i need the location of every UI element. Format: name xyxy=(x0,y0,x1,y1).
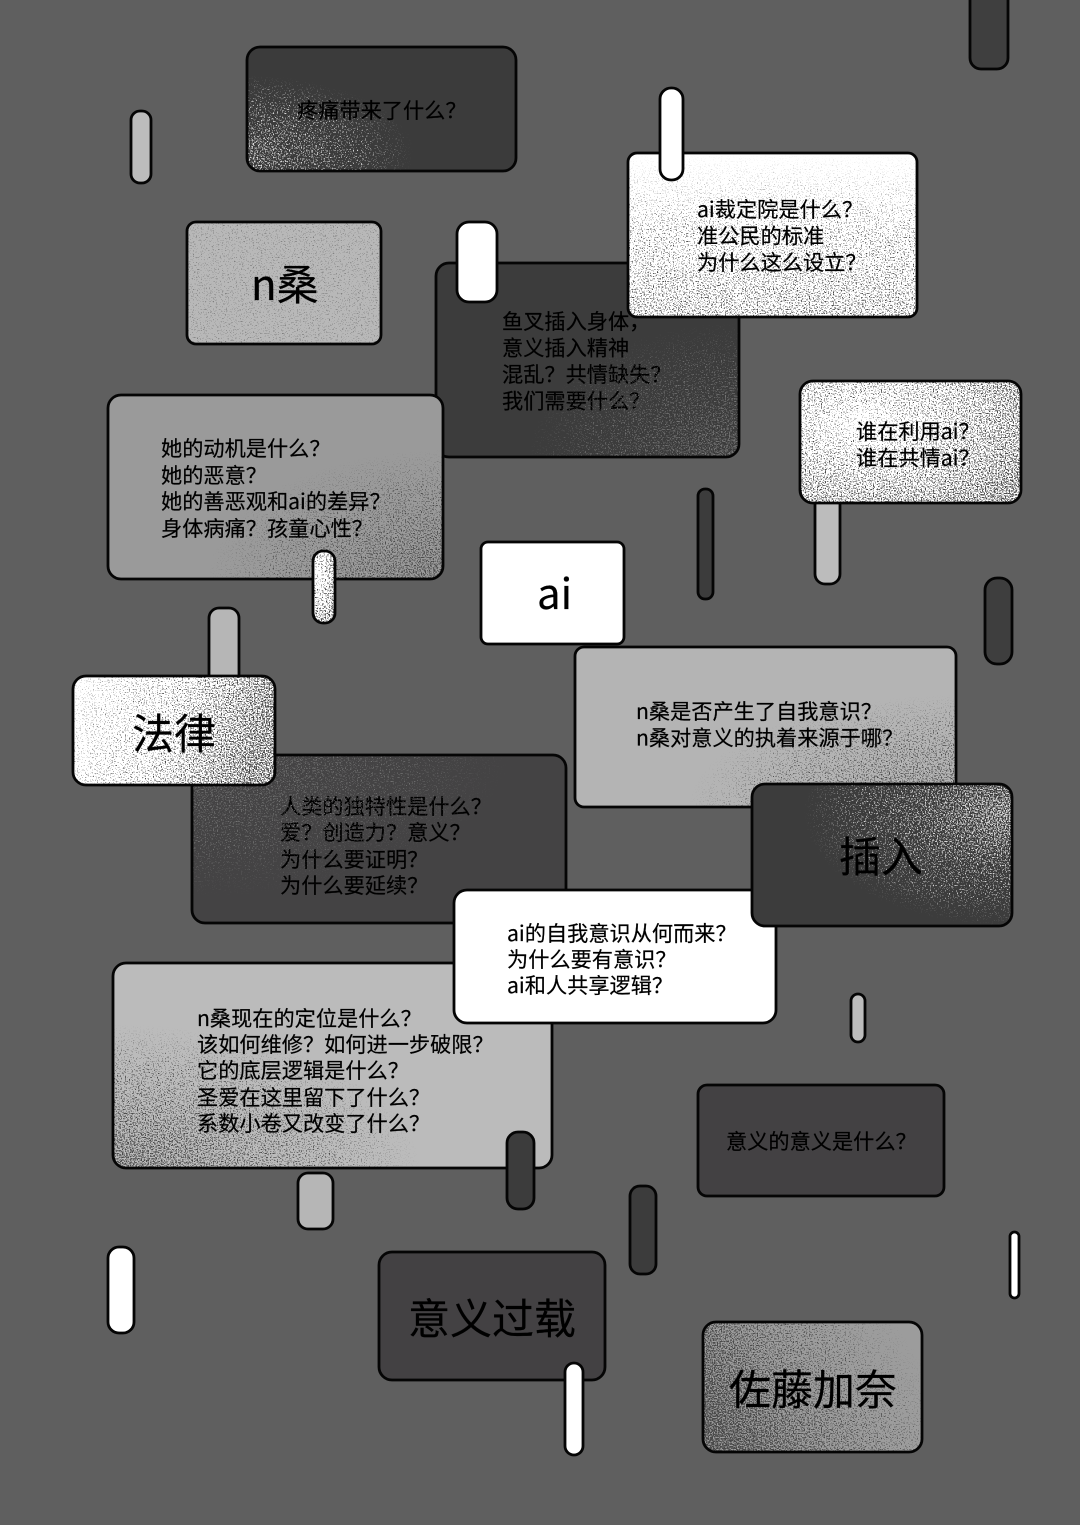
text: 佐藤加奈: 佐藤加奈 xyxy=(729,1357,897,1418)
pill: white lower left xyxy=(108,1247,134,1333)
text: n桑 status: 系数小卷又改变了什么？ xyxy=(197,1107,430,1138)
card: insertion title xyxy=(752,784,1012,926)
pill: small gray lower right xyxy=(851,994,865,1042)
card: ai tribunal question xyxy=(628,153,917,317)
card: who uses ai xyxy=(800,381,1021,503)
text: n桑 status: 该如何维修？如何进一步破限？ xyxy=(197,1028,494,1059)
text: ai tribunal question: ai裁定院是什么？ xyxy=(697,193,863,224)
text: n桑 self awareness: n桑是否产生了自我意识？ xyxy=(636,695,882,726)
card: meaning overload title xyxy=(379,1252,605,1380)
card: n桑 status xyxy=(113,963,552,1168)
text: her motive: 她的善恶观和ai的差异？ xyxy=(161,485,391,516)
pill: white on tribunal card xyxy=(660,88,683,180)
text: 插入: 插入 xyxy=(839,824,923,885)
card: her motive xyxy=(108,395,443,579)
pill: dark on status card xyxy=(507,1132,534,1209)
text: ai tribunal question: 为什么这么设立？ xyxy=(697,246,867,277)
text: n桑 self awareness: n桑对意义的执着来源于哪？ xyxy=(636,722,903,752)
text: harpoon question: 鱼叉插入身体， xyxy=(502,305,650,336)
text: her motive: 身体病痛？孩童心性？ xyxy=(161,512,373,543)
card: pain question xyxy=(247,47,516,171)
text: 意义过载: 意义过载 xyxy=(408,1286,576,1347)
text: n桑 status: 它的底层逻辑是什么？ xyxy=(197,1054,409,1085)
text: ai tribunal question: 准公民的标准 xyxy=(697,220,824,250)
pill: dark top right xyxy=(970,0,1008,69)
text: human uniqueness: 人类的独特性是什么？ xyxy=(280,790,492,821)
text: who uses ai: 谁在利用ai？ xyxy=(856,415,980,446)
text: meaning of meaning: 意义的意义是什么？ xyxy=(726,1125,917,1156)
text: ai self awareness: ai的自我意识从何而来？ xyxy=(507,917,737,948)
pill: gray under who card xyxy=(815,490,840,584)
pill: white on harpoon card xyxy=(457,222,497,302)
card: n桑 self awareness xyxy=(575,647,956,807)
pill: thin dark middle xyxy=(698,489,713,599)
text: n桑 status: 圣爱在这里留下了什么？ xyxy=(197,1081,430,1112)
card: harpoon question xyxy=(436,263,739,457)
text: her motive: 她的恶意？ xyxy=(161,459,267,490)
text: n桑 status: n桑现在的定位是什么？ xyxy=(197,1002,422,1033)
text: harpoon question: 意义插入精神 xyxy=(502,332,629,362)
card: ai self awareness xyxy=(454,890,776,1023)
pill: speckled on motive card xyxy=(313,551,335,623)
card: ai title xyxy=(481,542,624,644)
card: human uniqueness xyxy=(192,755,566,923)
text: ai self awareness: 为什么要有意识？ xyxy=(507,943,677,974)
pill: gray lower left xyxy=(298,1173,333,1229)
pill: dark right xyxy=(985,578,1012,664)
card: meaning of meaning xyxy=(698,1085,944,1196)
text: ai: ai xyxy=(537,561,572,622)
text: who uses ai: 谁在共情ai？ xyxy=(856,442,980,472)
card: n桑 title xyxy=(187,222,381,344)
card: law title xyxy=(73,676,275,785)
text: 法律: 法律 xyxy=(132,701,216,762)
card: Sato Kana title xyxy=(703,1322,922,1452)
text: pain question: 疼痛带来了什么？ xyxy=(297,94,467,125)
text: human uniqueness: 为什么要延续？ xyxy=(280,869,428,900)
text: n桑: n桑 xyxy=(251,252,319,313)
text: human uniqueness: 为什么要证明？ xyxy=(280,843,428,874)
pill: gray above law card xyxy=(209,608,239,688)
text: harpoon question: 我们需要什么？ xyxy=(502,384,650,416)
text: ai self awareness: ai和人共享逻辑？ xyxy=(507,969,673,1000)
text: her motive: 她的动机是什么？ xyxy=(161,432,331,463)
pill: thin white lower right xyxy=(1010,1232,1019,1298)
text: harpoon question: 混乱？共情缺失？ xyxy=(502,358,672,389)
pill: dark lower middle xyxy=(630,1186,656,1274)
pill: gray top left xyxy=(131,111,151,183)
pill: white on overload card xyxy=(565,1363,583,1455)
text: human uniqueness: 爱？创造力？意义？ xyxy=(280,816,471,847)
